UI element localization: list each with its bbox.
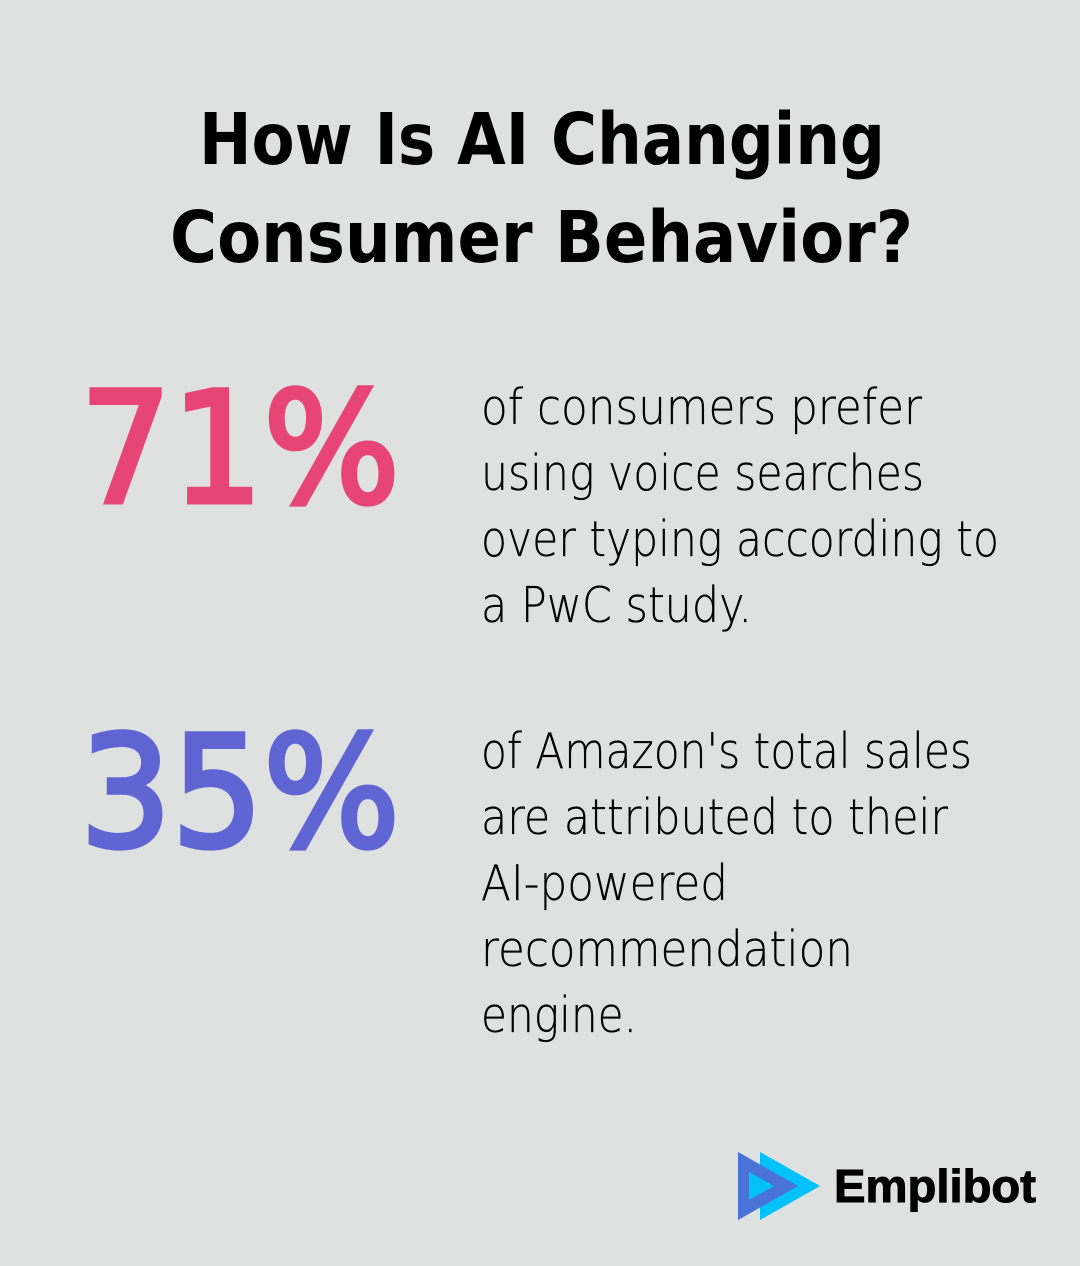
text block: Amazon recommendation description: AI-powered [481, 855, 728, 912]
logo: Emplibot [738, 1152, 1036, 1220]
title: Consumer Behavior? [170, 196, 913, 279]
text block: Amazon recommendation description: engine. [481, 987, 637, 1044]
text block: Amazon recommendation description [481, 723, 972, 1044]
text block: Amazon recommendation description: of Amazon's total sales [481, 723, 972, 780]
title [170, 98, 913, 279]
text block: voice search description: of consumers prefer [481, 379, 923, 436]
stat: 35%: 35% [80, 704, 400, 883]
title: How Is AI Changing [199, 98, 885, 181]
text block: voice search description: a PwC study. [481, 577, 752, 634]
text block: voice search description [481, 379, 999, 634]
stat: 71%: 71% [80, 360, 400, 539]
icon: play triangles [738, 1152, 820, 1220]
wordmark: Emplibot [834, 1160, 1036, 1212]
text block: Amazon recommendation description: are attributed to their [481, 789, 949, 846]
text block: voice search description: over typing according to [481, 511, 999, 568]
text block: Amazon recommendation description: recommendation [481, 921, 853, 978]
text block: voice search description: using voice searches [481, 445, 924, 502]
